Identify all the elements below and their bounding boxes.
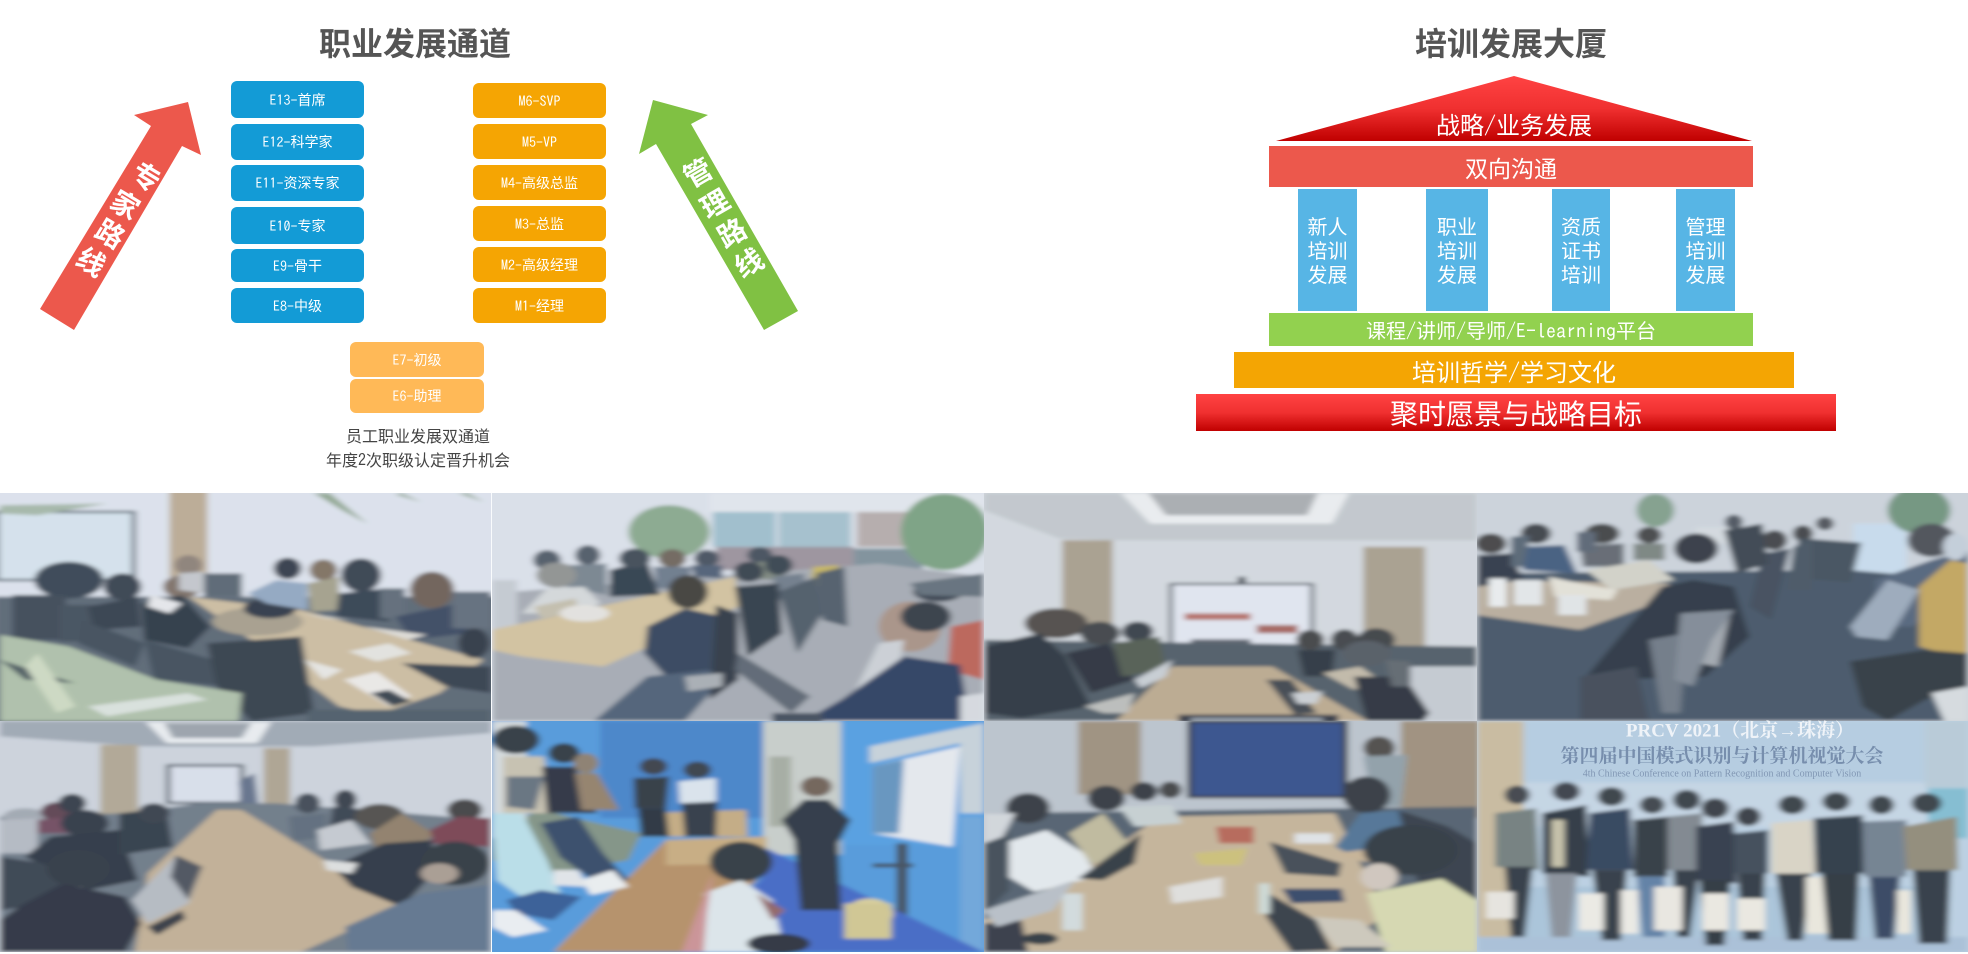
photo: table with snacks and attendees	[1477, 493, 1968, 721]
photo: blue room with presenter at screen	[492, 721, 984, 952]
panel: management ladder	[473, 83, 606, 323]
level E13	[231, 81, 364, 118]
level M6: M6-SVP	[518, 94, 560, 108]
pillar: new hire training: 培训	[1308, 235, 1348, 264]
pillar: new hire training	[1298, 189, 1357, 311]
arrow: management route: 线	[726, 238, 771, 286]
pillar: certification training: 资质	[1561, 211, 1601, 240]
pillar: management training	[1676, 189, 1735, 311]
photo: long table room with presenter	[0, 721, 491, 952]
arrow: expert route	[40, 102, 201, 330]
level M6	[473, 83, 606, 118]
arrow: expert route: 家	[103, 180, 148, 229]
level E10	[231, 207, 364, 244]
panel: expert ladder	[231, 81, 364, 323]
pillar: certification training: 证书	[1561, 235, 1601, 264]
arrow: management route: 管	[675, 148, 720, 196]
arrow: management route: 理	[692, 179, 737, 227]
level M3	[473, 206, 606, 241]
level E8: E8-中级	[273, 296, 322, 316]
level E6	[350, 379, 484, 413]
title: training development building: 培训发展大厦	[1415, 19, 1607, 65]
roof: strategy and business development	[1276, 76, 1752, 141]
level E7: E7-初级	[392, 350, 442, 370]
photo: seminar around long table	[492, 493, 984, 721]
level E12	[231, 124, 364, 160]
level E7	[350, 342, 484, 377]
pillar: management training: 管理	[1686, 211, 1726, 240]
arrow: management route: 路	[709, 208, 754, 256]
level M2: M2-高级经理	[501, 254, 578, 274]
photo: small meeting room with charts on screen	[984, 493, 1477, 721]
pillar: management training: 培训	[1686, 235, 1726, 264]
arrow: expert route: 路	[88, 209, 133, 258]
foundation: vision and strategic goals: 聚时愿景与战略目标	[1390, 392, 1642, 432]
banner text: conference English name: 4th Chinese Conference on Pattern Recognition and Computer Vision	[1583, 768, 1861, 779]
pillar: certification training: 培训	[1561, 259, 1601, 288]
level E8	[231, 288, 364, 323]
foundation: course platform: 课程/讲师/导师/E-learning平台	[1366, 315, 1656, 344]
level E10: E10-专家	[270, 216, 326, 236]
banner text: PRCV 2021: PRCV 2021（北京→珠海）	[1626, 718, 1854, 741]
banner: two-way communication: 双向沟通	[1465, 150, 1557, 184]
photo: meeting room with plants	[0, 493, 491, 721]
level M4: M4-高级总监	[501, 172, 578, 192]
photo: PRCV 2021 conference group	[1461, 713, 1968, 954]
level E6: E6-助理	[392, 386, 442, 406]
banner text: conference name: 第四届中国模式识别与计算机视觉大会	[1560, 741, 1884, 768]
pillar: certification training	[1552, 189, 1610, 311]
level M3: M3-总监	[515, 214, 564, 234]
foundation: training philosophy	[1234, 352, 1794, 388]
pillar: management training: 发展	[1686, 259, 1726, 288]
foundation: training philosophy: 培训哲学/学习文化	[1412, 352, 1616, 388]
caption: dual career channel	[326, 423, 510, 471]
pillar: career training: 职业	[1437, 211, 1477, 240]
pillar: new hire training: 新人	[1308, 211, 1348, 240]
roof: strategy and business development: 战略/业务发展	[1436, 106, 1592, 141]
level E11	[231, 165, 364, 201]
level M1: M1-经理	[515, 296, 564, 316]
foundation: vision and strategic goals	[1196, 394, 1836, 431]
level M1	[473, 288, 606, 323]
level M5	[473, 124, 606, 159]
arrow: expert route: 线	[69, 237, 114, 286]
pillar: new hire training: 发展	[1308, 259, 1348, 288]
banner: two-way communication	[1269, 146, 1753, 187]
level E11: E11-资深专家	[256, 173, 340, 193]
level E9: E9-骨干	[273, 256, 322, 276]
arrow: management route	[639, 100, 798, 330]
level E9	[231, 249, 364, 282]
level M2	[473, 247, 606, 282]
panel: entry levels	[350, 342, 484, 413]
pillar: career training: 培训	[1437, 235, 1477, 264]
arrow: expert route: 专	[124, 152, 169, 201]
pillar: career training: 发展	[1437, 259, 1477, 288]
level E13: E13-首席	[270, 90, 326, 110]
photo: meeting with blue slide and laptops	[984, 721, 1477, 952]
level M4	[473, 165, 606, 200]
pillar: career training	[1426, 189, 1488, 311]
title: career development channel: 职业发展通道	[319, 19, 511, 65]
caption: dual career channel: 员工职业发展双通道	[346, 423, 490, 447]
caption: dual career channel: 年度2次职级认定晋升机会	[326, 447, 510, 471]
level M5: M5-VP	[522, 134, 557, 148]
foundation: course platform	[1269, 313, 1753, 346]
level E12: E12-科学家	[262, 132, 332, 152]
